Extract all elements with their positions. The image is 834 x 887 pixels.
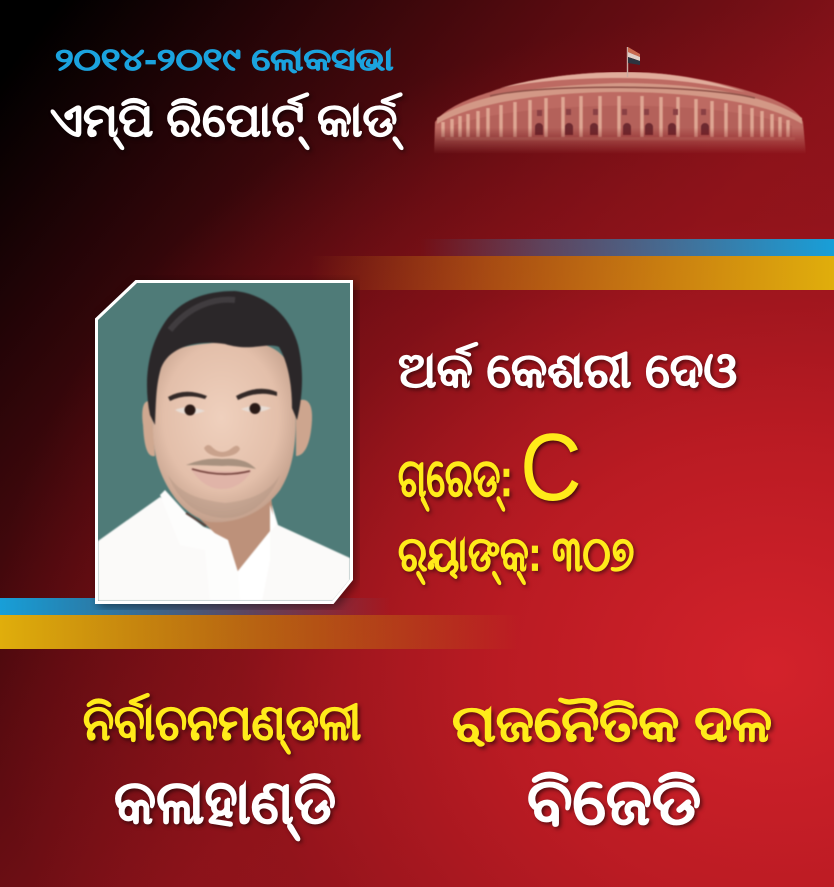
party label: ରାଜନୈତିକ ଦଳ [452, 695, 772, 752]
illustration: parliament building [434, 47, 806, 152]
nose [204, 445, 240, 457]
MP name: ଅର୍କ କେଶରୀ ଦେଓ [398, 344, 737, 398]
blue stripe top right [420, 239, 834, 256]
title: MP report card: ଏମ୍‌ପି ରିପୋର୍ଟ୍ କାର୍ଡ୍ [50, 93, 397, 146]
rank: ର୍‍ୟାଙ୍କ୍: ୩୦୭ [398, 527, 634, 581]
neck [200, 500, 274, 572]
hair [147, 291, 302, 425]
eyebrows [168, 392, 207, 401]
eyes [175, 407, 205, 414]
mouth [193, 470, 250, 488]
grade value: C [520, 414, 582, 521]
stubble [170, 478, 277, 518]
blue stripe lower left [0, 598, 390, 615]
grade [398, 414, 582, 521]
photo: MP portrait [92, 278, 360, 610]
constituency label: ନିର୍ବାଚନମଣ୍ଡଳୀ [83, 694, 361, 751]
party value: ବିଜେଡି [527, 766, 701, 838]
face [153, 342, 296, 522]
constituency value: କଳାହାଣ୍ଡି [114, 768, 336, 837]
gold stripe top right [310, 256, 834, 290]
gold stripe lower left [0, 615, 520, 649]
photo frame [95, 280, 353, 604]
heading: Lok Sabha term: ୨୦୧୪-୨୦୧୯ ଲୋକସଭା [55, 42, 394, 77]
icon: flag [628, 47, 640, 77]
ears [142, 401, 155, 456]
moustache [186, 459, 256, 469]
grade label: ଗ୍ରେଡ୍: [398, 449, 513, 508]
shirt [98, 497, 350, 601]
